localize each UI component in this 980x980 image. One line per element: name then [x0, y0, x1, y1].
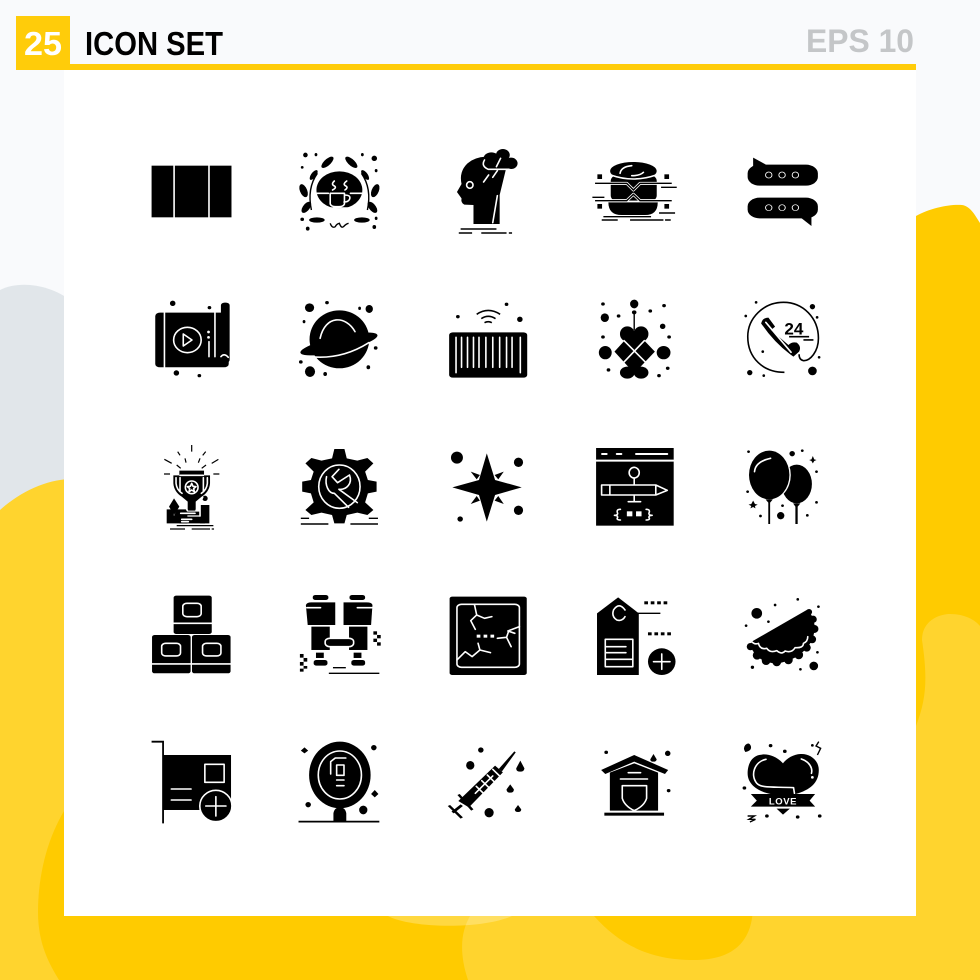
- icon: 24 hour phone: 24: [784, 319, 804, 338]
- icon: syringe with drops: [448, 747, 524, 819]
- icon: three columns layout: [152, 166, 231, 217]
- icon: empanada: [745, 598, 820, 671]
- icon: head with rain cloud: [457, 149, 518, 233]
- badge: 25: [16, 16, 70, 70]
- icon: chat bubbles: [748, 158, 818, 226]
- icon: binoculars: [300, 595, 381, 673]
- icon: glitched burger: [592, 162, 677, 220]
- header: [16, 16, 916, 70]
- icon: four point star: [451, 452, 523, 522]
- icon: standing mirror lens: [299, 742, 379, 822]
- icon row 5: [152, 742, 822, 823]
- icon: code design browser: [596, 448, 674, 526]
- icon: add expansion card: [152, 742, 232, 823]
- icon: settings gear wrench: [301, 449, 378, 524]
- icon: trophy: [164, 445, 219, 529]
- badge: 25: 25: [24, 25, 62, 62]
- icon: price tag with plus: [597, 597, 676, 675]
- icon rows 3 and 4: [152, 445, 820, 675]
- icon: video scroll: [155, 301, 230, 377]
- header rule: [16, 64, 916, 70]
- icon: party balloons: [746, 449, 818, 524]
- icon: ringed planet: [297, 301, 380, 377]
- icon rows 1 and 2: [152, 149, 820, 379]
- panel: white icon sheet: [64, 70, 916, 916]
- icon: protected house: [601, 751, 670, 816]
- title: ICON SET: [85, 25, 223, 62]
- icon: love heart banner: LOVE: [769, 796, 797, 807]
- icon: hanging ornament: [599, 300, 671, 379]
- icon: wifi barcode: [449, 303, 527, 378]
- icon: cracked map: [450, 597, 527, 675]
- icon: 24 hour phone: [744, 301, 820, 377]
- icon: stacked boxes: [152, 596, 231, 673]
- format label: EPS 10: [806, 23, 914, 59]
- icon: coffee laurel badge: [298, 153, 381, 231]
- icon: love heart banner: [743, 742, 822, 822]
